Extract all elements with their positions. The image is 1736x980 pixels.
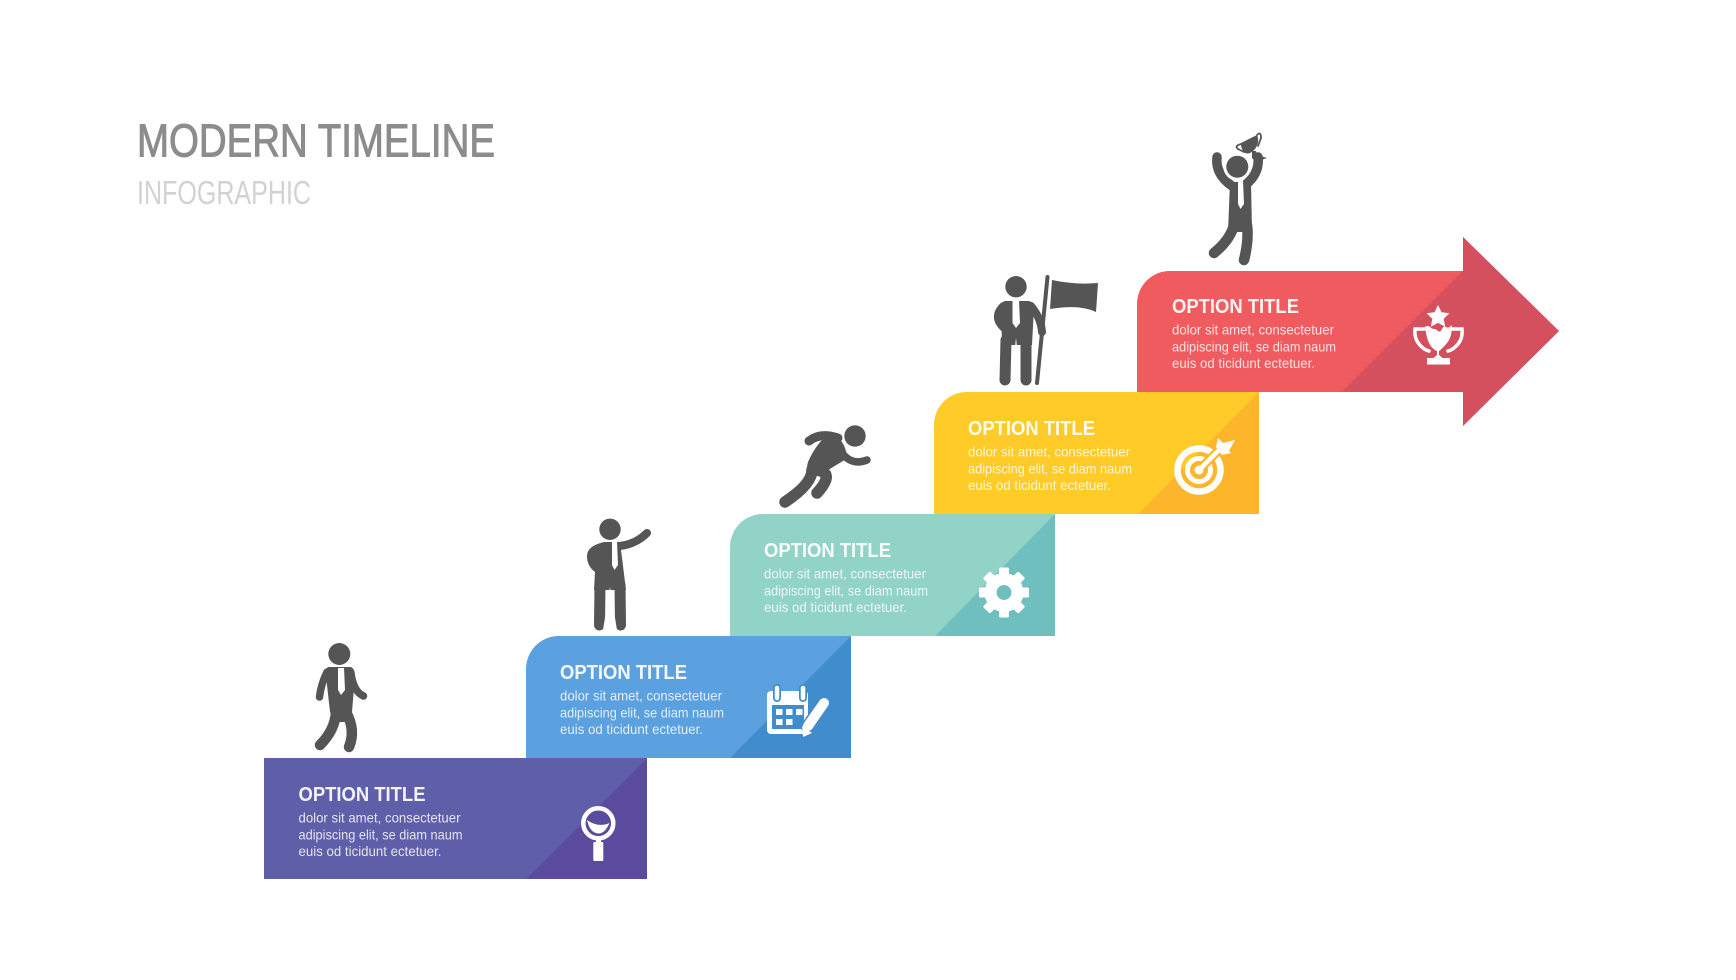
icon: magnifying glass xyxy=(583,808,613,861)
step 3 description: euis od ticidunt ectetuer. xyxy=(764,599,907,615)
step 2 description: dolor sit amet, consectetuer xyxy=(560,688,722,704)
step 1 description: dolor sit amet, consectetuer xyxy=(298,810,461,826)
step 4 description xyxy=(968,444,1132,493)
step 4 description: dolor sit amet, consectetuer xyxy=(968,444,1130,460)
step 1: purple block xyxy=(264,758,647,879)
icon: gear xyxy=(979,568,1029,618)
step 2 description: adipiscing elit, se diam naum xyxy=(560,704,724,720)
step 5 description: dolor sit amet, consectetuer xyxy=(1172,322,1334,338)
step 3 description: adipiscing elit, se diam naum xyxy=(764,582,928,598)
step 2 description: euis od ticidunt ectetuer. xyxy=(560,721,703,737)
figure: pointing man xyxy=(587,519,647,630)
step 2 description xyxy=(560,688,724,737)
icon: calendar with pencil xyxy=(767,688,824,737)
title: MODERN TIMELINE xyxy=(137,114,495,166)
icon: trophy xyxy=(1415,305,1462,364)
step 3 description xyxy=(764,566,928,615)
step 3: teal block xyxy=(730,514,1055,636)
step 5 description: adipiscing elit, se diam naum xyxy=(1172,338,1336,354)
step 1 description xyxy=(298,810,462,859)
step 2: blue block xyxy=(526,636,851,758)
figure: man raising trophy xyxy=(1214,134,1267,260)
step 5 description: euis od ticidunt ectetuer. xyxy=(1172,355,1315,371)
icon: target with arrow xyxy=(1178,438,1235,492)
step 3 description: dolor sit amet, consectetuer xyxy=(764,566,926,582)
step 4: yellow block xyxy=(934,392,1259,514)
step 1 description: adipiscing elit, se diam naum xyxy=(298,826,462,842)
step 1 description: euis od ticidunt ectetuer. xyxy=(298,843,442,859)
step 4 description: euis od ticidunt ectetuer. xyxy=(968,477,1111,493)
step 1 title: OPTION TITLE xyxy=(298,784,426,806)
step 3 title: OPTION TITLE xyxy=(764,540,891,562)
step 5 description xyxy=(1172,322,1336,371)
step 2 title: OPTION TITLE xyxy=(560,662,687,684)
trophy held up xyxy=(1237,134,1267,162)
figure: man with flag xyxy=(998,276,1098,385)
flag xyxy=(1037,277,1098,383)
step 5 title: OPTION TITLE xyxy=(1172,296,1299,318)
figure: running man xyxy=(785,425,867,502)
step 5: red arrow xyxy=(1137,237,1559,426)
figure: walking man xyxy=(320,643,364,747)
step 4 description: adipiscing elit, se diam naum xyxy=(968,460,1132,476)
step 4 title: OPTION TITLE xyxy=(968,418,1095,440)
subtitle: INFOGRAPHIC xyxy=(137,174,311,211)
